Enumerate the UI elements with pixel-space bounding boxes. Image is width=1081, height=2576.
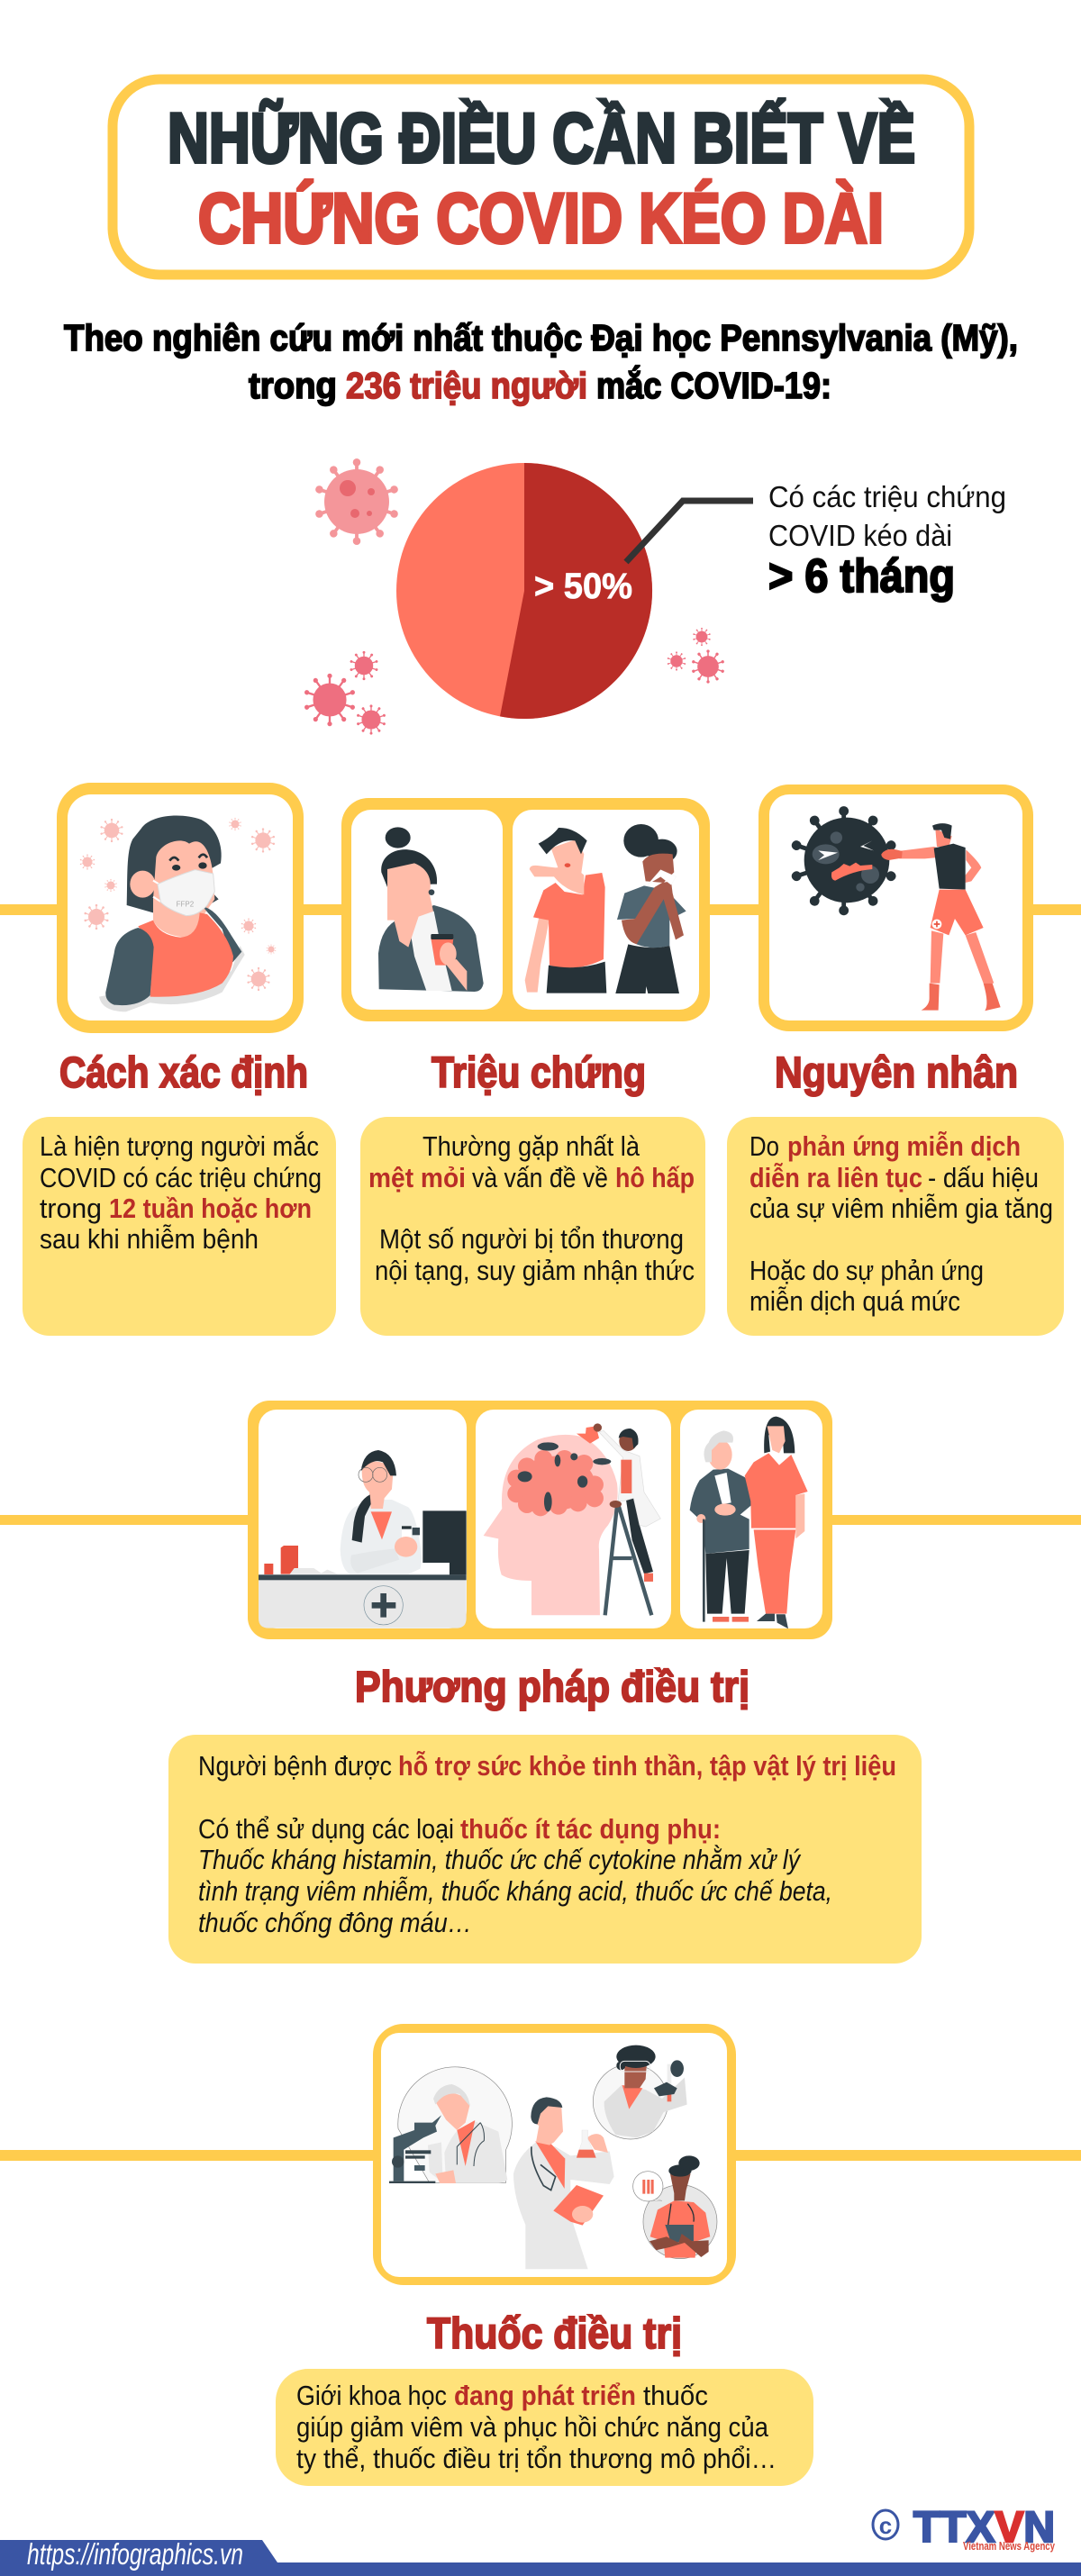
- pie callout text: > 6 tháng: [768, 550, 955, 603]
- panel: causes text: phản ứng miễn dịch: [787, 1130, 1021, 1162]
- heading: Cách xác định: Cách xác định: [59, 1049, 308, 1097]
- icon: lab scientist with test tube: [593, 2045, 687, 2139]
- panel: drugs text: thuốc: [643, 2380, 708, 2411]
- panel: treatment text: tình trạng viêm nhiễm, thuốc kháng acid, thuốc ức chế beta,: [198, 1875, 832, 1907]
- panel: symptoms text: nội tạng, suy giảm nhận thức: [375, 1255, 695, 1286]
- panel: scientists illustration: [373, 2024, 736, 2285]
- icon: coughing man: [525, 828, 606, 993]
- panel: treatment text: Thuốc kháng histamin, thuốc ức chế cytokine nhằm xử lý: [198, 1844, 802, 1875]
- panel: woman with mask: [57, 783, 304, 1033]
- panel: causes text: Do: [749, 1130, 779, 1162]
- panel: drugs text: ty thể, thuốc điều trị tổn thương mô phổi…: [296, 2443, 777, 2474]
- panel: symptoms text: hô hấp: [615, 1162, 695, 1193]
- panel: symptoms text: mệt mỏi: [368, 1162, 466, 1193]
- connector line row 1: [0, 904, 1081, 915]
- panel: definition text: Là hiện tượng người mắc: [40, 1130, 319, 1162]
- pie callout text: Có các triệu chứng: [768, 480, 1006, 513]
- intro heading: trong: [249, 365, 337, 406]
- panel: definition text: COVID có các triệu chứng: [40, 1162, 322, 1193]
- panel: definition text: [23, 1117, 336, 1336]
- panel: treatment illustrations: [248, 1401, 832, 1639]
- heading: Thuốc điều trị: Thuốc điều trị: [427, 2310, 682, 2358]
- panel: causes text: miễn dịch quá mức: [749, 1285, 960, 1317]
- panel: treatment text: thuốc chống đông máu…: [198, 1907, 472, 1938]
- panel: causes text: - dấu hiệu: [928, 1162, 1039, 1193]
- pie chart: [396, 463, 652, 719]
- icon: pharmacist: [259, 1450, 467, 1628]
- panel: definition text: sau khi nhiễm bệnh: [40, 1223, 259, 1255]
- decorative viruses around pie: [304, 458, 724, 735]
- panel: causes text: diễn ra liên tục: [749, 1162, 922, 1193]
- footer url: https://infographics.vn: [27, 2537, 243, 2571]
- icon: tired woman: [378, 827, 484, 992]
- connector line row 3: [0, 2150, 1081, 2161]
- title line 1: NHỮNG ĐIỀU CẦN BIẾT VỀ: [168, 98, 915, 177]
- icon: scientist with microscope: [389, 2067, 512, 2183]
- pie callout text: [768, 480, 1006, 603]
- panel: drugs text: đang phát triển: [454, 2380, 636, 2411]
- panel: drugs text: Giới khoa học: [296, 2380, 447, 2411]
- panel: treatment text: Có thể sử dụng các loại: [198, 1813, 454, 1845]
- intro heading: mắc COVID-19:: [596, 365, 831, 406]
- panel: symptoms text: Một số người bị tổn thương: [379, 1223, 684, 1255]
- logo: TTXVN: TTXVN: [913, 2504, 1055, 2552]
- panel: treatment text: Người bệnh được: [198, 1750, 392, 1782]
- icon: doctor with flask: [513, 2097, 614, 2269]
- pie callout text: COVID kéo dài: [768, 519, 952, 552]
- panel: symptoms text: và vấn đề về: [472, 1162, 608, 1193]
- panel: woman with mask: FFP2: [177, 900, 195, 908]
- icon: nurse with tablet: [633, 2155, 717, 2259]
- icon: nurse: [745, 1417, 808, 1628]
- panel: symptoms text: [360, 1117, 705, 1336]
- panel: symptoms: [341, 798, 710, 1021]
- icon: doctor on ladder: [577, 1423, 660, 1615]
- heading: Phương pháp điều trị: Phương pháp điều trị: [355, 1664, 749, 1711]
- connector line row 2: [0, 1515, 1081, 1525]
- icon: virus character: [790, 806, 897, 915]
- panel: causes text: Hoặc do sự phản ứng: [749, 1255, 984, 1286]
- icon: sneezing woman: [615, 824, 686, 993]
- pie label: > 50%: [534, 567, 632, 606]
- icon: boxer: [881, 823, 1001, 1011]
- heading: Triệu chứng: Triệu chứng: [431, 1049, 646, 1097]
- panel: definition text: 12 tuần hoặc hơn: [109, 1193, 312, 1224]
- logo: TTXVN: c: [879, 2512, 892, 2539]
- heading: Nguyên nhân: Nguyên nhân: [775, 1049, 1018, 1097]
- panel: treatment text: hỗ trợ sức khỏe tinh thần, tập vật lý trị liệu: [398, 1750, 896, 1782]
- intro heading: 236 triệu người: [346, 365, 587, 406]
- panel: drugs text: [276, 2369, 813, 2486]
- panel: definition text: trong: [40, 1193, 102, 1224]
- leader line: [626, 501, 753, 562]
- panel: symptoms text: Thường gặp nhất là: [422, 1130, 640, 1162]
- panel: causes text: [727, 1117, 1064, 1336]
- icon: head with brain: [484, 1435, 618, 1615]
- panel: boxer punching virus: [759, 785, 1033, 1031]
- title box: [113, 79, 969, 275]
- icon: elderly woman: [690, 1430, 754, 1622]
- panel: treatment text: [168, 1735, 922, 1964]
- panel: drugs text: giúp giảm viêm và phục hồi chức năng của: [296, 2411, 769, 2443]
- panel: treatment text: thuốc ít tác dụng phụ:: [460, 1813, 721, 1845]
- intro heading: [64, 317, 1018, 406]
- footer bar: [0, 2537, 1081, 2576]
- title line 2: CHỨNG COVID KÉO DÀI: [198, 178, 884, 258]
